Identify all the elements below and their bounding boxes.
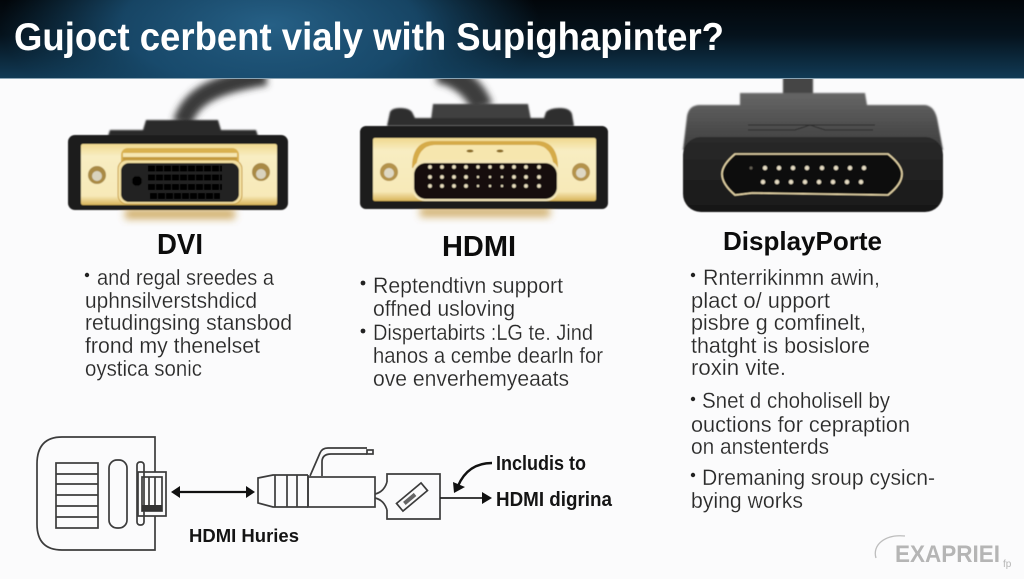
bullet list: HDMI: offned usloving [373, 296, 515, 321]
bullet list: DisplayPort: Rnterrikinmn awin, [703, 265, 880, 290]
HDMI back shell [387, 104, 574, 126]
header band [0, 0, 1024, 79]
bullet list: DisplayPort: Dremaning sroup cysicn- [702, 465, 935, 490]
DisplayPort emboss mark [748, 125, 875, 130]
bullet list: HDMI [361, 273, 603, 391]
bullet list: DVI: oystica sonic [85, 356, 202, 381]
DisplayPort socket [722, 154, 902, 195]
bullet list: DVI: and regal sreedes a [97, 265, 275, 290]
connector: DisplayPort [683, 76, 943, 212]
DVI back shell [108, 120, 258, 136]
icon: HDMI plug [258, 448, 440, 519]
arrow: curved callout [453, 463, 492, 493]
DisplayPort cable [783, 76, 813, 96]
bullet list: HDMI: hanos a cembe dearln for [373, 343, 603, 368]
bullet list: DVI: frond my thenelset [85, 333, 260, 358]
DVI socket [121, 163, 239, 202]
diagram: connection schematic [37, 437, 613, 550]
HDMI body [360, 126, 608, 209]
label: Includis to: Includis to [496, 453, 586, 475]
DisplayPort upper housing [683, 93, 943, 150]
HDMI gold reflection [420, 207, 550, 217]
DVI gold reflection [125, 209, 235, 219]
DVI screws [88, 163, 270, 184]
bullet list: DisplayPort: ouctions for ceprаption [691, 412, 910, 437]
HDMI socket [412, 160, 559, 201]
bullet list: DVI: uphnsilverstshdicd [85, 288, 257, 313]
heading: DVI: DVI [157, 229, 203, 261]
HDMI screws [380, 163, 590, 181]
bullet list: DisplayPort: on anstenterds [691, 434, 829, 459]
icon: device [37, 437, 166, 550]
bullet list: HDMI: ove enverhemyeaats [373, 366, 569, 391]
DVI body [68, 135, 288, 210]
DVI cable [182, 76, 266, 124]
bullet list: DisplayPort: plact o/ upport [691, 288, 830, 313]
bullet list: DisplayPort: Snet d choholisell by [702, 388, 890, 413]
logo watermark [875, 536, 1012, 570]
bullet list: HDMI: Reptendtivn support [373, 273, 563, 298]
connector: DVI [68, 76, 288, 219]
logo watermark: fp [1003, 559, 1012, 570]
HDMI gold plate [373, 138, 596, 201]
bullet list: DisplayPort [691, 265, 935, 513]
logo watermark: EXAPRIEI [895, 541, 1000, 568]
heading: DisplayPorte: DisplayPorte [723, 226, 882, 256]
panel: DisplayPort text [691, 226, 935, 513]
bullet list: DisplayPort: bying works [691, 488, 803, 513]
bullet list: DisplayPort: pisbre g comfinelt, [691, 310, 866, 335]
bullet list: HDMI: Dispertabirts :LG te. Jind [373, 320, 593, 345]
DVI shell [118, 148, 242, 204]
title: Gujoct cerbent vialy with Supighapinter? [14, 16, 724, 59]
DisplayPort front face [683, 137, 943, 212]
label: HDMI digrina: HDMI digrina [496, 489, 613, 511]
label: HDMI Huries: HDMI Huries [189, 526, 299, 546]
panel: DVI text [85, 229, 292, 381]
HDMI shell [412, 141, 558, 168]
heading: HDMI: HDMI [442, 231, 516, 263]
arrow: to HDMI digrina [440, 492, 492, 504]
bullet list: DisplayPort: thatght is bosislore [691, 333, 870, 358]
arrow: double-headed [171, 486, 255, 498]
connector: HDMI [360, 72, 608, 217]
HDMI cable [438, 72, 482, 108]
bullet list: DVI: retudingsing stansbod [85, 310, 292, 335]
bullet list: DisplayPort: roxin vite. [691, 355, 786, 380]
panel: HDMI text [361, 231, 603, 391]
bullet list: DVI [85, 265, 292, 381]
DVI gold plate [81, 144, 277, 205]
